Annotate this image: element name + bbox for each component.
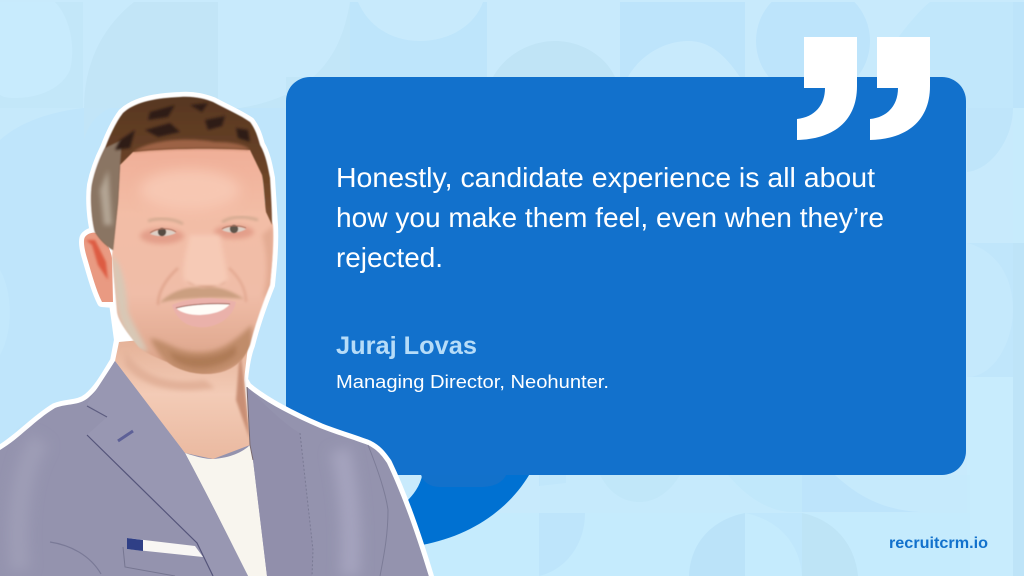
icon: closing quotation marks <box>797 37 930 140</box>
brand url: recruitcrm.io <box>889 535 988 552</box>
speaker name: Juraj Lovas <box>336 332 477 360</box>
quote text <box>336 162 884 273</box>
nose <box>183 235 228 289</box>
moustache <box>160 287 244 303</box>
white t-shirt <box>185 445 267 576</box>
hair: dark tufts <box>115 103 250 150</box>
quote text: Honestly, candidate experience is all about <box>336 162 875 193</box>
ear <box>84 233 113 302</box>
hair: reddish fringe <box>133 140 250 152</box>
panel: speech bubble <box>286 77 966 475</box>
cheek creases <box>158 268 178 305</box>
pocket <box>123 547 175 576</box>
pen in pocket <box>127 538 203 557</box>
eye sockets <box>140 228 184 244</box>
right lapel <box>247 387 313 576</box>
portrait of speaker <box>0 97 430 576</box>
jacket <box>0 361 430 576</box>
left lapel <box>87 361 248 576</box>
grey side stubble <box>112 255 148 352</box>
hair <box>91 97 272 250</box>
speech bubble tail <box>408 470 532 545</box>
eyes <box>150 230 176 236</box>
neck <box>115 330 250 459</box>
forehead highlight <box>140 170 240 210</box>
quote text: how you make them feel, even when they’re <box>336 202 884 233</box>
hair: grey temple <box>91 140 122 250</box>
beard <box>150 325 252 376</box>
quote text: rejected. <box>336 242 443 273</box>
speaker role: Managing Director, Neohunter. <box>336 372 609 392</box>
right face shadow <box>262 228 274 297</box>
face <box>112 146 274 376</box>
jacket shading <box>18 440 351 576</box>
white cut-out outline <box>0 97 430 576</box>
eyebrows <box>148 219 183 224</box>
mouth <box>172 298 236 327</box>
